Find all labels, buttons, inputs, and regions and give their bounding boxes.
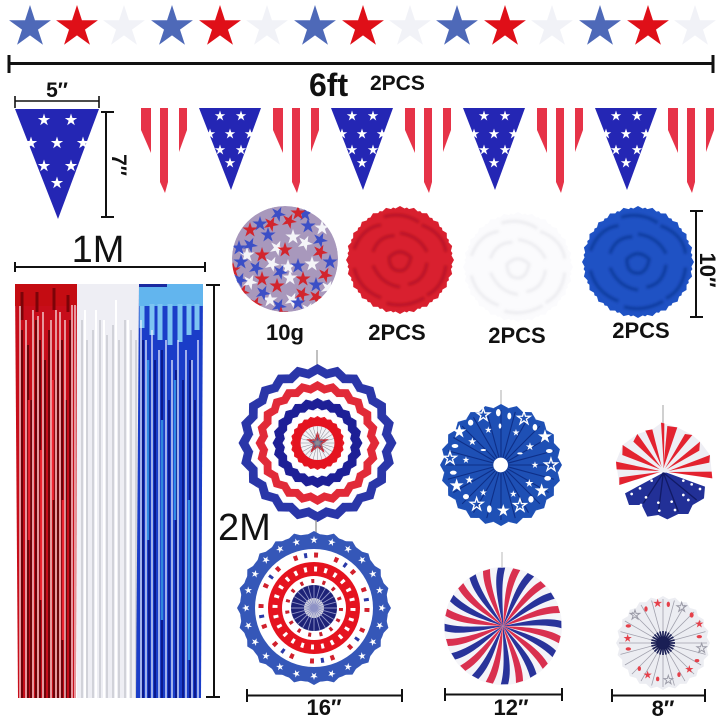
foil curtains [15, 284, 203, 698]
label 2PCS garland: 2PCS [370, 72, 425, 95]
label 2PCS white: 2PCS [488, 323, 546, 348]
pom height dimension [690, 211, 720, 317]
fan: red white blue half [616, 405, 712, 519]
label 16 inches: 16′′ [306, 695, 342, 720]
white fan backing [616, 423, 712, 485]
red ribbons [141, 108, 714, 193]
fan: spiral stripes [441, 552, 565, 688]
label 1M: 1M [72, 229, 124, 271]
dimension 12 inches [445, 688, 562, 720]
fan: blue stars and dots [440, 390, 562, 526]
red marks [624, 599, 703, 681]
red curtain [15, 284, 77, 698]
pennant banner [141, 108, 714, 193]
white curtain [77, 284, 139, 698]
confetti circle [232, 206, 338, 312]
label 12 inches: 12′′ [493, 695, 529, 720]
large blue pennant [15, 109, 99, 219]
star border [242, 536, 386, 680]
white pom pom [458, 207, 578, 348]
white pom shape [458, 207, 578, 327]
star garland [9, 5, 716, 45]
blue pom shape [576, 200, 700, 324]
red pom pom [341, 201, 459, 345]
spiral stripes [441, 564, 565, 688]
label 6ft: 6ft [309, 67, 348, 103]
blue curtain [136, 284, 203, 698]
large pennant with dimensions [15, 79, 130, 219]
blue pom pom [576, 200, 700, 343]
white scalloped disc [616, 596, 710, 690]
blue lower half [625, 473, 705, 519]
white stars [103, 5, 716, 45]
curtain height dimension [206, 285, 271, 697]
red pom shape [341, 201, 459, 319]
blue pennants [199, 108, 657, 190]
red wedges [616, 423, 712, 485]
curtain width dimension [15, 229, 205, 272]
blue scalloped disc [440, 404, 562, 526]
label 7 inches: 7′′ [107, 154, 130, 176]
fan: white small [616, 596, 710, 690]
white dots [630, 479, 701, 512]
white marks [444, 408, 557, 516]
outline stars [630, 602, 706, 684]
label 10g: 10g [266, 320, 304, 345]
red stars [56, 5, 669, 45]
garland length dimension [9, 55, 713, 103]
white disc [444, 567, 562, 685]
pennant width dimension [15, 96, 99, 108]
blue stars [9, 5, 621, 45]
label 5 inches: 5′′ [46, 79, 68, 102]
confetti [225, 204, 338, 345]
concentric rings [237, 531, 391, 685]
dimension 8 inches [612, 689, 705, 720]
scalloped rings [238, 364, 396, 522]
fan: blue star border [237, 520, 391, 685]
label 2PCS blue: 2PCS [612, 318, 670, 343]
label 2M: 2M [218, 507, 271, 549]
label 10 inches: 10′′ [695, 252, 720, 288]
pennant height dimension [101, 112, 114, 217]
label 2PCS red: 2PCS [368, 320, 426, 345]
fan: striped rings 16 inch [238, 350, 396, 522]
dimension 16 inches [247, 689, 402, 720]
ring marks [261, 555, 367, 661]
